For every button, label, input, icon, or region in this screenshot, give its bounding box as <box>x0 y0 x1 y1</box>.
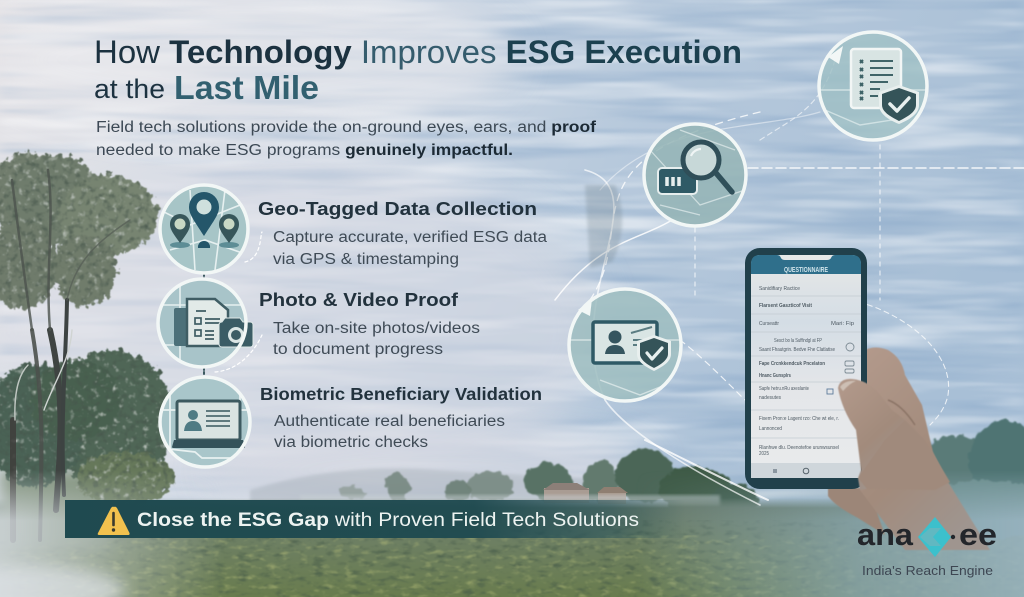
icon: checklist with shield <box>819 32 930 140</box>
phone: questionnaire app: Sanidifiary Ractice <box>759 286 800 292</box>
icon: document and camera <box>158 279 253 370</box>
icon: geo-tagged map pins <box>160 185 248 273</box>
feature: photo and video proof <box>259 290 480 358</box>
decorative connector network <box>204 60 1024 505</box>
intro text: needed to make ESG programs genuinely impactful. <box>96 142 513 159</box>
hand: thumb over phone <box>838 379 950 490</box>
intro text: Field tech solutions provide the on-ground eyes, ears, and proof <box>96 119 597 136</box>
phone: questionnaire app: 2025 <box>759 451 769 457</box>
title: Last Mile <box>174 69 319 106</box>
hand holding phone: back fingers <box>828 348 990 550</box>
feature: biometric beneficiary validation: via biometric checks <box>274 434 428 451</box>
phone: questionnaire app: Saant Fhautgrin. Bedve Fhe Clatlatise <box>759 347 835 353</box>
feature: geo-tagged data collection: via GPS & timestamping <box>273 251 459 268</box>
phone: questionnaire app: Sapfe hetru.nRu axeslante <box>759 386 809 392</box>
intro text <box>96 119 597 159</box>
phone: questionnaire app: Hnanc Gunsplrs <box>759 373 791 379</box>
phone: questionnaire app: Fixem Pron:e Lagent rzo: Che wt ele, r. <box>759 416 839 422</box>
title: at the <box>94 74 165 104</box>
phone: questionnaire app: Flarsent Gaszticof Visit <box>759 303 812 309</box>
background: right side trees <box>914 420 1024 540</box>
feature: geo-tagged data collection: Capture accurate, verified ESG data <box>273 229 547 246</box>
feature: biometric beneficiary validation <box>260 384 542 451</box>
icon: magnifier over data card <box>644 124 746 226</box>
background: right field haze <box>660 476 1024 597</box>
feature: biometric beneficiary validation: Biometric Beneficiary Validation <box>260 384 542 404</box>
banner: close the ESG gap: Close the ESG Gap with Proven Field Tech Solutions <box>137 510 639 531</box>
phone: questionnaire app: Curseattr <box>759 321 779 327</box>
background: crop field <box>0 498 1024 597</box>
banner: close the ESG gap <box>65 500 685 538</box>
feature: photo and video proof: Photo & Video Proof <box>259 290 459 310</box>
background: distant tree line and farmhouses <box>250 449 759 516</box>
phone: questionnaire app: Rlanhwe dlu. Deenotefoe urunwsunsel <box>759 445 839 451</box>
phone: questionnaire app: nadesutes <box>759 395 781 401</box>
feature: geo-tagged data collection <box>258 199 547 268</box>
logo: anaxee: India's Reach Engine <box>862 564 993 578</box>
feature: biometric beneficiary validation: Authenticate real beneficiaries <box>274 413 505 430</box>
feature: photo and video proof: Take on-site photos/videos <box>273 320 480 337</box>
phone: questionnaire app: Mari: Fip <box>831 321 854 327</box>
icon: id card with shield <box>569 289 690 401</box>
title <box>94 34 742 106</box>
decorative translucent shadow shape <box>585 185 622 268</box>
logo: anaxee: ana <box>857 517 914 552</box>
background: foreground trees <box>0 153 1024 597</box>
feature: photo and video proof: to document progress <box>273 341 443 358</box>
phone: questionnaire app: Sesct bo la Suffindgl at FP <box>774 338 822 344</box>
phone: questionnaire app <box>745 248 867 489</box>
feature: geo-tagged data collection: Geo-Tagged Data Collection <box>258 199 537 219</box>
logo: anaxee: ee <box>959 517 997 552</box>
icon: warning triangle <box>98 507 130 535</box>
title: How Technology Improves ESG Execution <box>94 34 742 70</box>
phone: questionnaire app: Fape Crcnkkendcuk Pncelaton <box>759 361 825 367</box>
logo: anaxee <box>857 517 997 578</box>
icon: laptop with id profile <box>160 377 250 470</box>
phone: questionnaire app: Lannonced <box>759 426 782 432</box>
phone: questionnaire app: QUESTIONNAIRE <box>784 265 828 274</box>
